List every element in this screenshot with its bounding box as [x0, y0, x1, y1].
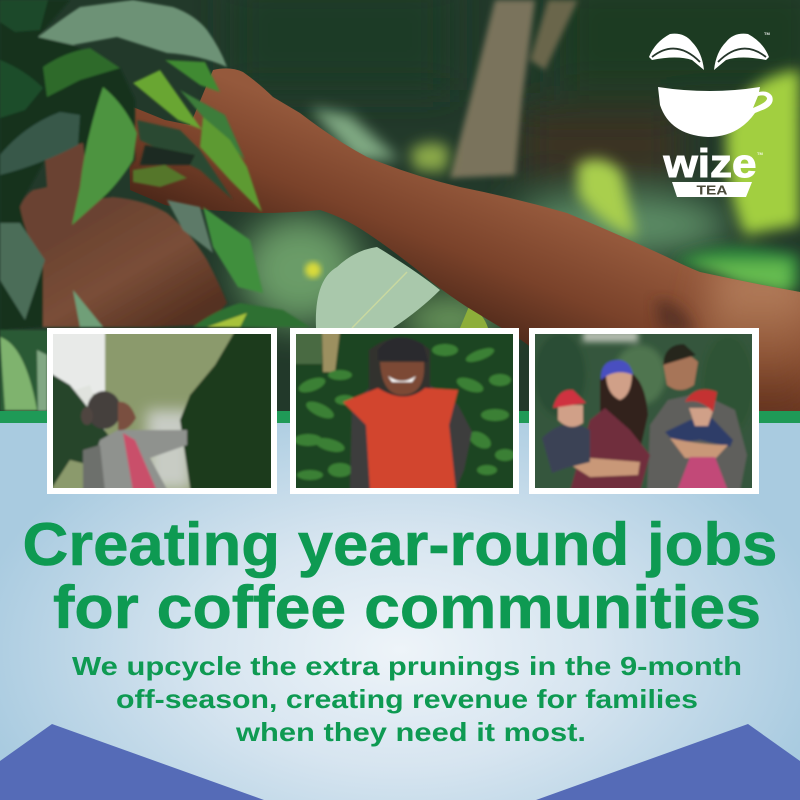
body text: when they need it most. [235, 717, 586, 747]
icon: tea leaves [649, 34, 769, 70]
green band [0, 411, 800, 423]
woman [599, 374, 649, 444]
blurred tree trunk [450, 0, 578, 178]
lower hand [20, 143, 227, 327]
blurred green foreground leaves [310, 70, 800, 295]
woman [97, 428, 189, 488]
headline [22, 511, 777, 641]
leaf cluster [0, 0, 310, 411]
blurred background foliage [230, 0, 800, 345]
blue corner shape right [536, 724, 800, 800]
arm end and wrist crease [651, 273, 800, 373]
wize tea logo [649, 31, 773, 198]
headline: Creating year-round jobs [22, 511, 777, 578]
toddler left [542, 424, 590, 473]
arm and upper hand [128, 68, 800, 411]
photo 3: family with two children [529, 328, 759, 494]
wordmark: TEA [696, 182, 728, 198]
headline: for coffee communities [53, 574, 761, 641]
wordmark [662, 31, 770, 198]
dark foliage backing [0, 0, 135, 330]
yellow bud [305, 262, 321, 278]
large mid leaf [316, 247, 440, 328]
baby right [665, 418, 733, 447]
blue corner shape left [0, 724, 264, 800]
photo 2: smiling woman in red apron [290, 328, 519, 494]
body text [72, 651, 742, 747]
person [350, 385, 472, 491]
photo 1: woman picking leaves [47, 328, 277, 494]
body text: We upcycle the extra prunings in the 9-month [72, 651, 742, 681]
wordmark: TM [764, 31, 770, 36]
man [647, 393, 747, 491]
body text: off-season, creating revenue for families [116, 684, 698, 714]
wordmark: TM [757, 151, 763, 156]
light blue gradient background [0, 423, 800, 800]
wordmark: wize [662, 142, 756, 186]
icon: tea cup [658, 87, 773, 137]
coffee bush [180, 331, 274, 491]
hero photo: hands picking leaves [0, 0, 800, 420]
